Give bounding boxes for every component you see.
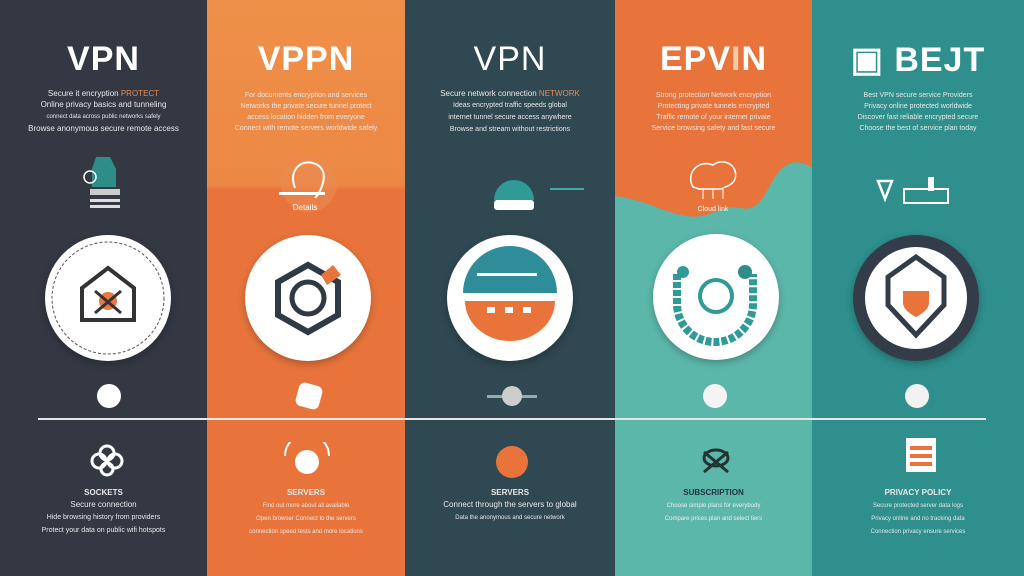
title 5: ▣ BEJT bbox=[851, 41, 985, 79]
icon: cloud 4 bbox=[690, 161, 736, 213]
intro text 1 bbox=[28, 89, 179, 133]
intro text 2: Connect with remote servers worldwide safely bbox=[235, 125, 377, 132]
intro text 5: Discover fast reliable encrypted secure bbox=[858, 114, 978, 121]
panel: column 1 bbox=[0, 0, 207, 576]
title 2: VPPN bbox=[258, 40, 354, 78]
small icon 3 bbox=[487, 386, 537, 406]
intro text 1: Secure it encryption PROTECT bbox=[48, 89, 159, 98]
circle icon 2 bbox=[245, 235, 371, 361]
bottom text 3: Connect through the servers to global bbox=[443, 500, 577, 509]
intro text 2: For documents encryption and services bbox=[245, 92, 367, 99]
bottom text 5: Connection privacy ensure services bbox=[871, 529, 965, 535]
circle icon 3 bbox=[447, 235, 573, 361]
intro text 5 bbox=[858, 92, 978, 132]
small icon 2 bbox=[294, 381, 324, 411]
bottom icon 2 bbox=[284, 442, 330, 474]
intro text 5: Best VPN secure service Providers bbox=[864, 92, 972, 99]
intro text 3 bbox=[440, 89, 580, 133]
bottom text 5: Privacy online and no tracking data bbox=[871, 516, 965, 522]
intro text 4: Traffic remote of your internet private bbox=[656, 114, 771, 121]
bottom text 2: Find out more about all available bbox=[263, 503, 349, 509]
bottom text 4 bbox=[665, 488, 762, 522]
intro text 4: Strong protection Network encryption bbox=[656, 92, 771, 99]
icon: shield and bar 5 bbox=[876, 177, 949, 204]
title 1: VPN bbox=[67, 40, 140, 78]
bottom text 2: connection speed tests and more locations bbox=[249, 529, 363, 535]
title 4: EPVIN bbox=[660, 40, 767, 78]
panel: column 2 bbox=[207, 0, 405, 576]
intro text 5: Choose the best of service plan today bbox=[859, 125, 977, 132]
intro text 3: Browse and stream without restrictions bbox=[450, 126, 570, 133]
bottom text 5: PRIVACY POLICY bbox=[885, 488, 951, 497]
panel: column 4 bbox=[615, 0, 812, 576]
intro text 2 bbox=[235, 92, 378, 132]
divider line bbox=[38, 418, 986, 420]
bottom text 3 bbox=[443, 488, 577, 521]
bottom icon 5 bbox=[906, 438, 936, 472]
bottom text 2: Open browser Connect to the servers bbox=[256, 516, 356, 522]
intro text 1: Browse anonymous secure remote access bbox=[28, 124, 179, 133]
circle icon 1 bbox=[45, 235, 171, 361]
bottom text 1: Secure connection bbox=[70, 500, 137, 509]
intro text 2: access location hidden from everyone bbox=[247, 114, 365, 121]
bottom text 3: Data the anonymous and secure network bbox=[455, 515, 565, 521]
intro text 4: Protecting private tunnels encrypted bbox=[658, 103, 769, 110]
bottom text 5 bbox=[870, 488, 966, 535]
intro text 3: Secure network connection NETWORK bbox=[440, 89, 580, 98]
panel: column 5 bbox=[812, 0, 1024, 576]
bottom text 2 bbox=[249, 488, 363, 535]
bottom text 1 bbox=[42, 488, 166, 534]
intro text 4: Service browsing safety and fast secure bbox=[652, 125, 775, 132]
bottom text 2: SERVERS bbox=[287, 488, 325, 497]
circle icon 5 bbox=[853, 235, 979, 361]
bottom text 3: SERVERS bbox=[491, 488, 529, 497]
intro text 1: connect data across public networks safely bbox=[46, 114, 161, 120]
intro text 4 bbox=[652, 92, 776, 132]
icon: helmet 3 bbox=[494, 180, 584, 210]
circle icon 4 bbox=[653, 234, 779, 360]
icon: globe 2 bbox=[279, 161, 336, 212]
icon: server lock bbox=[83, 157, 120, 208]
bottom text 5: Secure protected server data logs bbox=[873, 503, 963, 509]
bottom icon 4 bbox=[702, 448, 730, 473]
small icon 1 bbox=[97, 384, 121, 408]
icon: globe 2: Details bbox=[293, 203, 317, 212]
bottom text 4: SUBSCRIPTION bbox=[683, 488, 744, 497]
bottom text 4: Choose simple plans for everybody bbox=[667, 503, 760, 509]
bottom icon 3 bbox=[496, 446, 528, 478]
title 3: VPN bbox=[474, 40, 546, 78]
bottom text 1: Hide browsing history from providers bbox=[47, 514, 160, 521]
panel: column 3 bbox=[405, 0, 615, 576]
icon: cloud 4: Cloud link bbox=[698, 206, 729, 213]
intro text 1: Online privacy basics and tunneling bbox=[41, 100, 166, 109]
bottom icon 1 bbox=[90, 444, 124, 476]
intro text 3: internet tunnel secure access anywhere bbox=[448, 114, 572, 121]
small icon 5 bbox=[905, 384, 929, 408]
orange wave header bbox=[615, 0, 812, 217]
bottom text 4: Compare prices plan and select tiers bbox=[665, 516, 762, 522]
bottom text 1: Protect your data on public wifi hotspots bbox=[42, 527, 165, 534]
bottom text 1: SOCKETS bbox=[84, 488, 123, 497]
intro text 3: Ideas encrypted traffic speeds global bbox=[453, 102, 567, 109]
small icon 4 bbox=[703, 384, 727, 408]
intro text 5: Privacy online protected worldwide bbox=[864, 103, 972, 110]
intro text 2: Networks the private secure tunnel protect bbox=[240, 103, 372, 110]
